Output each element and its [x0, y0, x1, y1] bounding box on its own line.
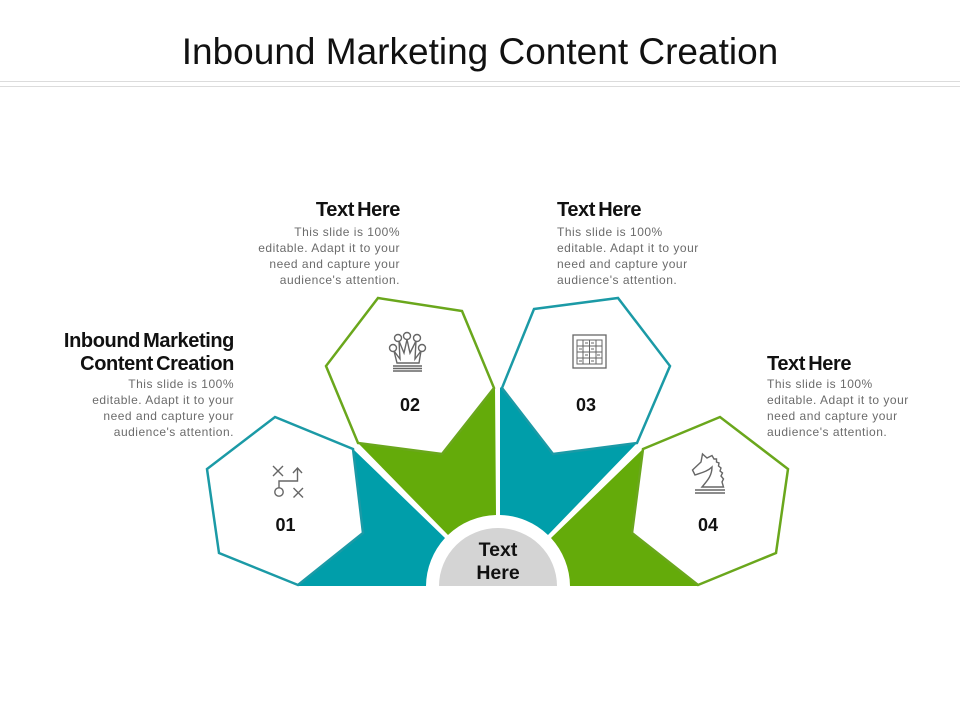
body 01: editable. Adapt it to your: [92, 393, 234, 407]
number 03: 03: [576, 395, 596, 415]
fan segment 01 teal: [298, 449, 445, 586]
body 02: need and capture your: [269, 257, 400, 271]
body 04: [767, 377, 909, 439]
fan segment 03 teal: [500, 387, 637, 535]
text block 03: [557, 199, 699, 287]
centre label: Here: [476, 562, 520, 584]
body 04: need and capture your: [767, 409, 898, 423]
body 04: This slide is 100%: [767, 377, 873, 391]
icon: play diagram: [273, 466, 303, 498]
fan segment 02 green: [358, 387, 496, 535]
heading 01: [64, 330, 234, 375]
icon: grid table: [573, 335, 606, 368]
heading 01: Inbound Marketing: [64, 330, 234, 352]
body 03: editable. Adapt it to your: [557, 241, 699, 255]
body 04: editable. Adapt it to your: [767, 393, 909, 407]
number 04: 04: [698, 515, 718, 535]
number 02: 02: [400, 395, 420, 415]
icon: crown: [390, 332, 426, 371]
centre label: Text: [479, 539, 517, 561]
body 02: editable. Adapt it to your: [258, 241, 400, 255]
body 03: This slide is 100%: [557, 225, 663, 239]
body 04: audience's attention.: [767, 425, 887, 439]
heading 03: Text Here: [557, 199, 641, 221]
number 01: 01: [275, 515, 296, 535]
heptagon 01 outline: [207, 417, 363, 585]
body 03: audience's attention.: [557, 273, 677, 287]
body 02: audience's attention.: [280, 273, 400, 287]
heading 02: Text Here: [316, 199, 400, 221]
text block 01: [64, 330, 234, 439]
heptagon 03 outline: [502, 298, 670, 454]
text block 02: [258, 199, 400, 287]
heading 04: Text Here: [767, 353, 851, 375]
centre semicircle: [439, 528, 557, 586]
body 01: [92, 377, 234, 439]
body 01: This slide is 100%: [128, 377, 234, 391]
heptagon 02 outline: [326, 298, 494, 454]
body 01: need and capture your: [103, 409, 234, 423]
heading 01: Content Creation: [80, 353, 234, 375]
body 02: [258, 225, 400, 287]
fan segment 04 green: [551, 449, 698, 586]
body 01: audience's attention.: [114, 425, 234, 439]
text block 04: [767, 353, 909, 439]
body 03: [557, 225, 699, 287]
heptagon 04 outline: [632, 417, 788, 585]
icon: chess knight: [692, 454, 725, 493]
body 02: This slide is 100%: [294, 225, 400, 239]
centre label: [476, 539, 520, 584]
body 03: need and capture your: [557, 257, 688, 271]
title: Inbound Marketing Content Creation: [182, 31, 778, 72]
